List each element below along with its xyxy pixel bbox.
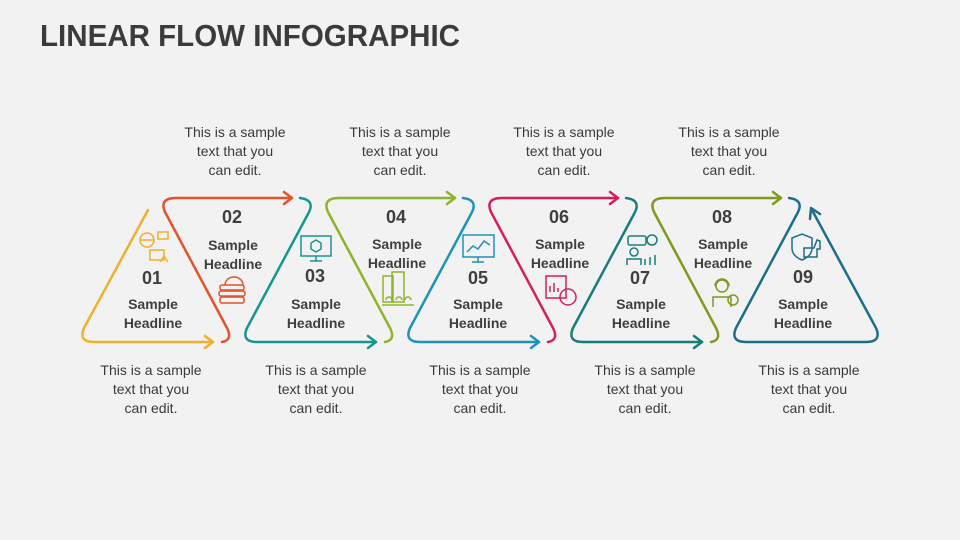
step 03: Sample xyxy=(291,296,341,312)
step 02: Sample xyxy=(208,237,258,253)
bottom text 07: This is a sample xyxy=(594,362,696,378)
bottom text 03: can edit. xyxy=(290,400,342,416)
step 06: Sample xyxy=(535,236,585,252)
step 04: Headline xyxy=(368,255,426,271)
step 07: Headline xyxy=(612,315,670,331)
step 05 xyxy=(408,198,539,348)
step 06 xyxy=(489,192,618,342)
step 02: 02 xyxy=(222,207,242,227)
bottom text 03: This is a sample xyxy=(265,362,367,378)
bottom text 05 xyxy=(429,362,531,416)
step 04: Sample xyxy=(372,236,422,252)
bottom text 03 xyxy=(265,362,367,416)
top text 02 xyxy=(184,124,286,178)
step 07 xyxy=(571,198,702,348)
top text 08: text that you xyxy=(691,143,767,159)
top text 06: text that you xyxy=(526,143,602,159)
top text 08 xyxy=(678,124,780,178)
top text 04 xyxy=(349,124,451,178)
step 04: 04 xyxy=(386,207,406,227)
top text 04: This is a sample xyxy=(349,124,451,140)
top text 06 xyxy=(513,124,615,178)
top text 04: can edit. xyxy=(374,162,426,178)
top text 02: can edit. xyxy=(209,162,261,178)
bottom text 09 xyxy=(758,362,860,416)
bottom text 09: text that you xyxy=(771,381,847,397)
title: LINEAR FLOW INFOGRAPHIC xyxy=(40,18,460,53)
bottom text 07: text that you xyxy=(607,381,683,397)
top text 06: can edit. xyxy=(538,162,590,178)
bottom text 07 xyxy=(594,362,696,416)
bottom text 09: This is a sample xyxy=(758,362,860,378)
step 08: Sample xyxy=(698,236,748,252)
step 05: Sample xyxy=(453,296,503,312)
step 07: Sample xyxy=(616,296,666,312)
bottom text 09: can edit. xyxy=(783,400,835,416)
step 03 xyxy=(245,198,376,348)
top text 04: text that you xyxy=(362,143,438,159)
step 08 xyxy=(652,192,781,342)
step 05: Headline xyxy=(449,315,507,331)
step 04 xyxy=(326,192,455,342)
step 01: Sample xyxy=(128,296,178,312)
bottom text 05: text that you xyxy=(442,381,518,397)
step 09: Headline xyxy=(774,315,832,331)
step 02 xyxy=(163,192,292,342)
bottom text 05: can edit. xyxy=(454,400,506,416)
bottom text 01: text that you xyxy=(113,381,189,397)
bottom text 01 xyxy=(100,362,202,416)
bottom text 03: text that you xyxy=(278,381,354,397)
step 07: 07 xyxy=(630,268,650,288)
step 06: 06 xyxy=(549,207,569,227)
top text 08: can edit. xyxy=(703,162,755,178)
bottom text 01: This is a sample xyxy=(100,362,202,378)
step 01: 01 xyxy=(142,268,162,288)
step 09: 09 xyxy=(793,267,813,287)
step 09 xyxy=(734,198,878,342)
step 08: 08 xyxy=(712,207,732,227)
step 05: 05 xyxy=(468,268,488,288)
step 06: Headline xyxy=(531,255,589,271)
bottom text 07: can edit. xyxy=(619,400,671,416)
step 02: Headline xyxy=(204,256,262,272)
top text 02: text that you xyxy=(197,143,273,159)
bottom text 05: This is a sample xyxy=(429,362,531,378)
top text 02: This is a sample xyxy=(184,124,286,140)
top text 06: This is a sample xyxy=(513,124,615,140)
step 01: Headline xyxy=(124,315,182,331)
step 09: Sample xyxy=(778,296,828,312)
step 01 xyxy=(82,210,213,348)
step 03: 03 xyxy=(305,266,325,286)
step 08: Headline xyxy=(694,255,752,271)
step 03: Headline xyxy=(287,315,345,331)
bottom text 01: can edit. xyxy=(125,400,177,416)
top text 08: This is a sample xyxy=(678,124,780,140)
